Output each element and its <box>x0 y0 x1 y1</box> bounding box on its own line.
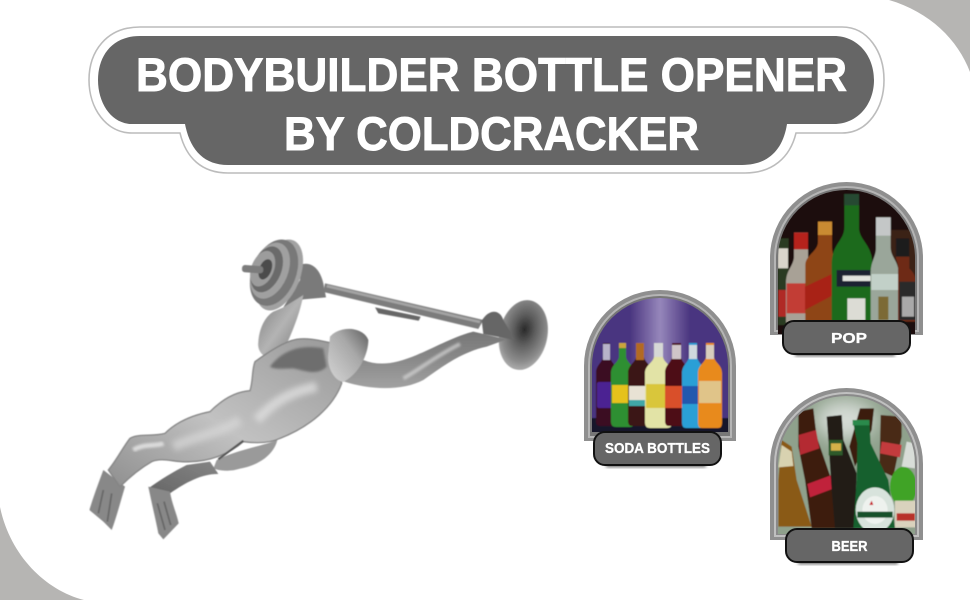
soda photo <box>590 296 730 436</box>
soda label shadow <box>606 463 706 467</box>
beer arch frame <box>770 388 923 540</box>
pop photo <box>776 188 920 336</box>
second foot <box>148 487 179 539</box>
beer bottle group <box>778 408 917 533</box>
banner fill <box>98 36 874 165</box>
right hand <box>482 312 515 340</box>
pop label <box>783 321 910 354</box>
soda label <box>594 432 721 465</box>
pop label shadow <box>795 352 895 356</box>
card: pop <box>770 182 923 356</box>
beer label text: BEER <box>832 538 868 555</box>
beer label <box>786 529 913 562</box>
left barbell plates <box>241 232 312 317</box>
soda arch frame <box>584 290 736 441</box>
card: beer <box>770 388 923 564</box>
pop bottle row <box>778 194 916 325</box>
torso and leg <box>108 339 342 487</box>
beer photo <box>776 394 918 536</box>
product figure: bodybuilder bottle opener <box>89 232 554 539</box>
head <box>328 329 368 382</box>
right arm <box>342 332 507 388</box>
soda bottle row <box>596 343 722 428</box>
left arm <box>258 295 303 359</box>
right barbell plate <box>493 295 554 375</box>
first foot <box>89 470 125 530</box>
body highlights <box>133 387 317 459</box>
title line 2: BY COLDCRACKER <box>284 108 699 161</box>
card: soda bottles <box>584 290 736 467</box>
barbell bar <box>323 283 483 329</box>
title line 1: BODYBUILDER BOTTLE OPENER <box>136 49 847 102</box>
corner accent: bottom left <box>0 507 84 600</box>
chest shadow <box>270 347 327 372</box>
second leg <box>213 440 277 471</box>
corner accent: top right <box>889 0 970 72</box>
beer label shadow <box>798 560 898 564</box>
bar grip detail <box>375 307 421 321</box>
pop label text: POP <box>831 330 867 347</box>
soda label text: SODA BOTTLES <box>605 441 710 457</box>
banner outline <box>89 27 884 173</box>
pop arch frame <box>770 182 923 335</box>
title banner <box>89 27 884 173</box>
left hand <box>283 264 326 307</box>
